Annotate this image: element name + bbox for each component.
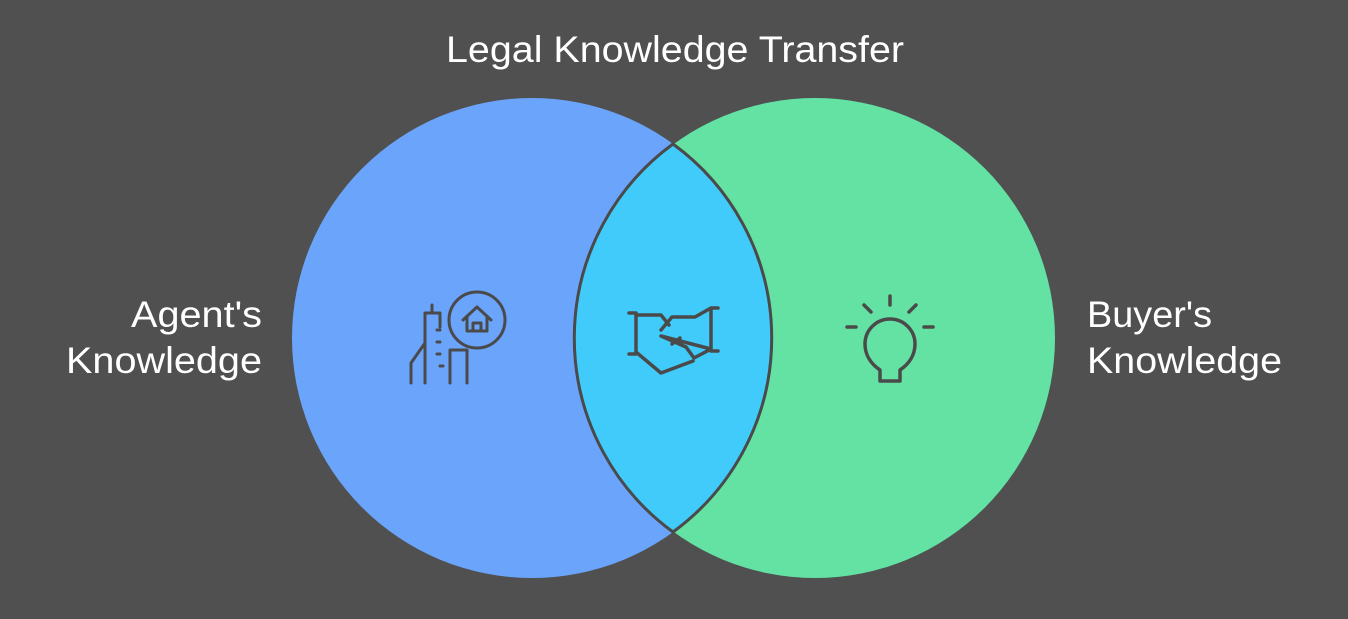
circle: agent's knowledge xyxy=(292,98,772,578)
intersection overlap xyxy=(574,144,772,532)
icon: handshake xyxy=(629,308,718,373)
circle: buyer's knowledge xyxy=(575,98,1055,578)
label: buyer's knowledge: Knowledge xyxy=(1087,340,1282,381)
icon: building with house xyxy=(411,292,505,383)
label: agent's knowledge: Agent's xyxy=(131,294,262,335)
label: buyer's knowledge: Buyer's xyxy=(1087,294,1212,335)
label: agent's knowledge: Knowledge xyxy=(66,340,262,381)
icon: lightbulb xyxy=(847,296,933,381)
title: Legal Knowledge Transfer xyxy=(446,29,904,70)
